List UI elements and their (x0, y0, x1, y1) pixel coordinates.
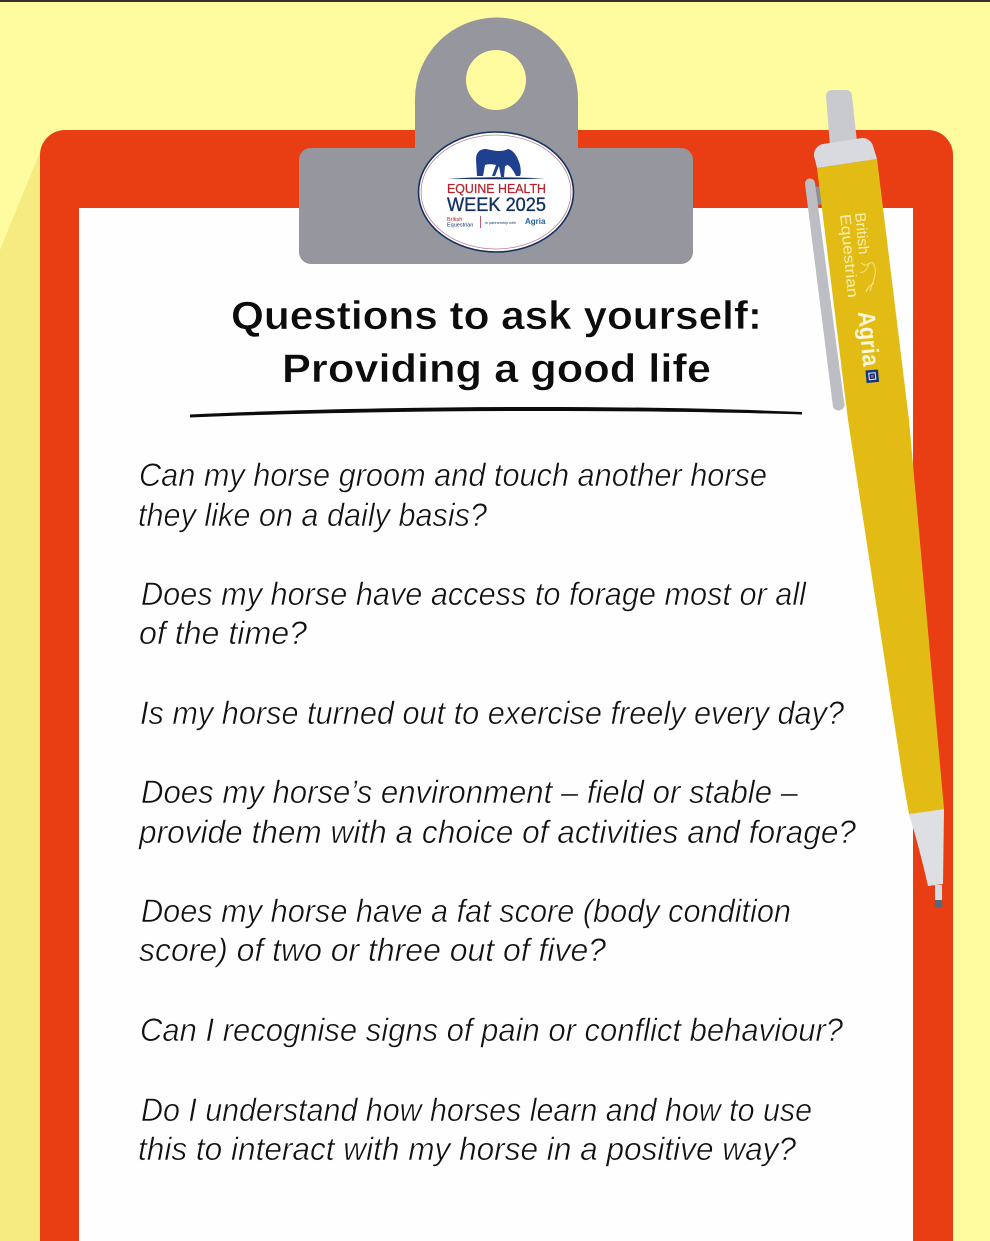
pen nib (934, 885, 943, 908)
logo text: British Equestrian (447, 217, 473, 228)
pen tip cone (909, 809, 944, 886)
pen collar (814, 138, 877, 168)
logo text: British Equestrian: Equestrian (447, 222, 473, 228)
question 3: Is my horse turned out to exercise freely every day? (140, 695, 844, 731)
questions list (138, 457, 856, 1167)
icon: grazing horse (476, 149, 521, 177)
question 7: Do I understand how horses learn and how to use (141, 1092, 812, 1128)
logo text: partner Agria: Agria (525, 217, 546, 226)
pen clip (805, 178, 845, 411)
pen (805, 90, 944, 908)
question 6: Can I recognise signs of pain or conflict behaviour? (140, 1012, 843, 1048)
title (231, 294, 762, 391)
logo text: Equine Health: EQUINE HEALTH (447, 182, 546, 196)
question 1 (138, 457, 767, 533)
pen text: British Equestrian (836, 212, 876, 298)
question 2: of the time? (139, 615, 307, 651)
pen text: Agria: Agria (852, 310, 884, 368)
logo text: Week 2025: WEEK 2025 (447, 195, 546, 216)
question 7 (138, 1092, 812, 1167)
pen button (826, 90, 857, 146)
pen body (817, 159, 944, 814)
question 2: Does my horse have access to forage most or all (141, 576, 807, 612)
pen text: British Equestrian: British (851, 212, 872, 255)
question 7: this to interact with my horse in a positive way? (138, 1131, 796, 1167)
title: Questions to ask yourself: (231, 294, 762, 338)
question 5: score) of two or three out of five? (139, 932, 606, 968)
logo text: partner Agria: in partnership with (485, 221, 516, 225)
icon: British Equestrian horse mark (860, 263, 875, 292)
question 1: they like on a daily basis? (138, 497, 487, 533)
question 4: provide them with a choice of activities and forage? (138, 814, 856, 850)
question 4 (138, 774, 856, 850)
clipboard clip (299, 18, 693, 264)
question 1: Can my horse groom and touch another horse (139, 457, 767, 493)
question 4: Does my horse’s environment – field or stable – (141, 774, 798, 810)
title: Providing a good life (282, 347, 711, 391)
logo: Equine Health Week 2025 (418, 132, 574, 252)
logo text: British Equestrian: British (447, 217, 462, 223)
logo text: partner Agria (485, 217, 546, 226)
icon: Agria logo square (865, 369, 879, 383)
question 5: Does my horse have a fat score (body condition (141, 893, 791, 929)
title underline (190, 407, 802, 418)
pen text: British Equestrian: Equestrian (836, 213, 861, 298)
question 2 (139, 576, 807, 651)
question 5 (139, 893, 791, 968)
